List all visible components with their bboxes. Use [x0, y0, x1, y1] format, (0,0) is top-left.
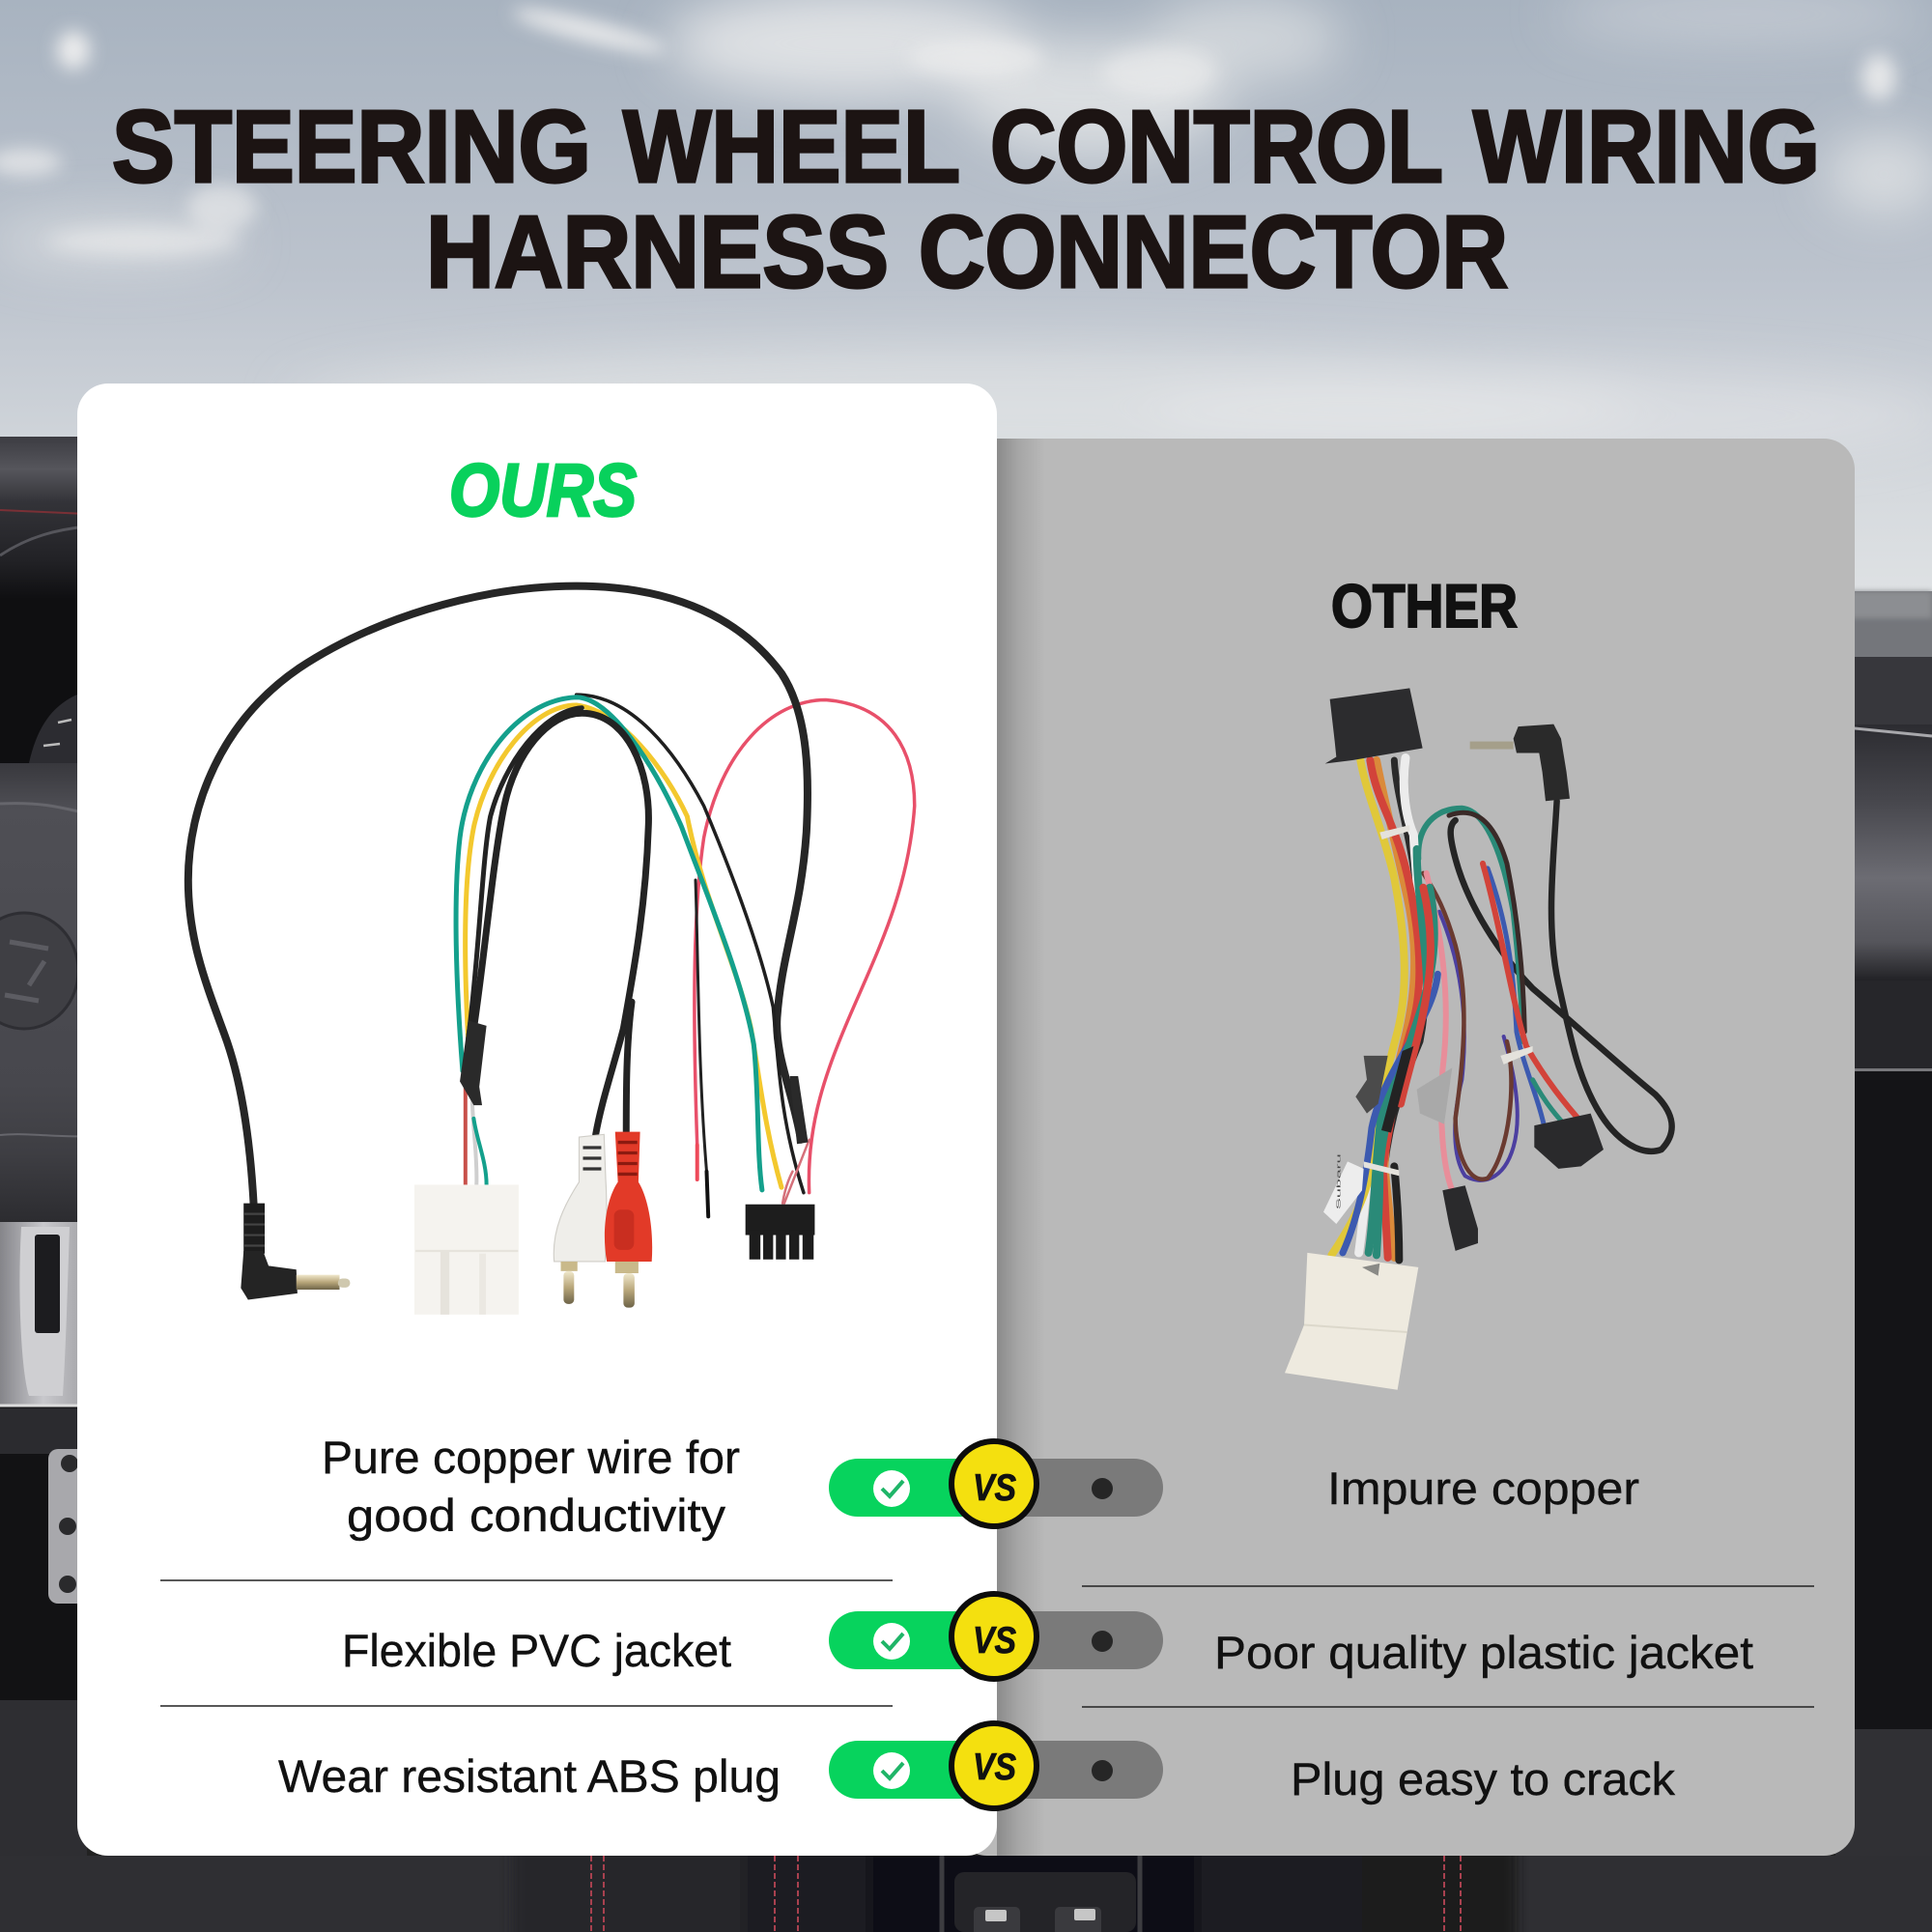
panel: other [956, 439, 1855, 1856]
heading: other: OTHER [1331, 573, 1518, 640]
icon: black multi pin connector [746, 1205, 814, 1260]
coloured wire loops [1418, 809, 1584, 1190]
badge: vs: VS [973, 1620, 1016, 1662]
icon: dot [1092, 1760, 1113, 1781]
dividers [160, 1580, 1814, 1707]
row 1: ours text: Pure copper wire for [322, 1432, 740, 1483]
badge: vs [952, 1441, 1037, 1526]
icon: white connector plug [414, 1184, 519, 1315]
icon: angled audio jack [241, 1204, 350, 1299]
label tag [1323, 1153, 1364, 1224]
icon: dot [1092, 1478, 1113, 1499]
background: dashboard left strip [0, 437, 87, 1932]
icon: check [873, 1470, 910, 1507]
badge: vs [952, 1723, 1037, 1808]
badge: vs [952, 1594, 1037, 1679]
background: seats and console bottom strip [87, 1856, 1835, 1932]
comparison toggle row 2 [829, 1594, 1163, 1679]
icon: check [873, 1623, 910, 1660]
icon: white RCA plug [554, 1134, 607, 1304]
title: STEERING [112, 90, 591, 204]
row 2: ours text: Flexible PVC jacket [342, 1625, 731, 1676]
zip ties [1364, 825, 1533, 1176]
icon: cream plug [1285, 1253, 1418, 1390]
badge: vs: VS [973, 1747, 1016, 1788]
black audio cable [1451, 801, 1672, 1151]
comparison toggle row 1 [829, 1441, 1163, 1526]
row 1: ours text [322, 1432, 740, 1541]
main wire bundle [1331, 757, 1437, 1260]
black and silver sleeves [1355, 1046, 1452, 1133]
background: dashboard right strip [1835, 591, 1932, 1932]
heat shrink sleeves [460, 1020, 809, 1144]
icon: lower connectors [1442, 1114, 1604, 1251]
icon: dot [1092, 1631, 1113, 1652]
product photo: other harness [1285, 688, 1672, 1390]
row 2: other text: Poor quality plastic jacket [1214, 1627, 1753, 1678]
product photo: our harness [188, 586, 915, 1315]
title [112, 90, 1820, 309]
title: HARNESS [426, 195, 889, 309]
icon: check [873, 1752, 910, 1789]
row 3: other text: Plug easy to crack [1291, 1753, 1676, 1804]
title: WIRING [1473, 90, 1820, 204]
background: sky with clouds [0, 0, 1932, 618]
row 3: ours text: Wear resistant ABS plug [278, 1750, 781, 1802]
row 1: ours text: good conductivity [347, 1490, 726, 1541]
icon: top black connector [1325, 688, 1423, 763]
title: WHEEL [623, 90, 960, 204]
title: CONNECTOR [919, 195, 1508, 309]
icon: red RCA plug [605, 1132, 652, 1308]
background: right dashboard behind top edge [1835, 591, 1932, 618]
comparison toggle row 3 [829, 1723, 1163, 1808]
title: CONTROL [990, 90, 1443, 204]
heading: ours: OURS [449, 449, 637, 532]
icon: audio jack [1470, 724, 1570, 801]
badge: vs: VS [973, 1467, 1016, 1509]
row 1: other text: Impure copper [1327, 1463, 1639, 1514]
label tag: Subaru [1335, 1153, 1342, 1209]
